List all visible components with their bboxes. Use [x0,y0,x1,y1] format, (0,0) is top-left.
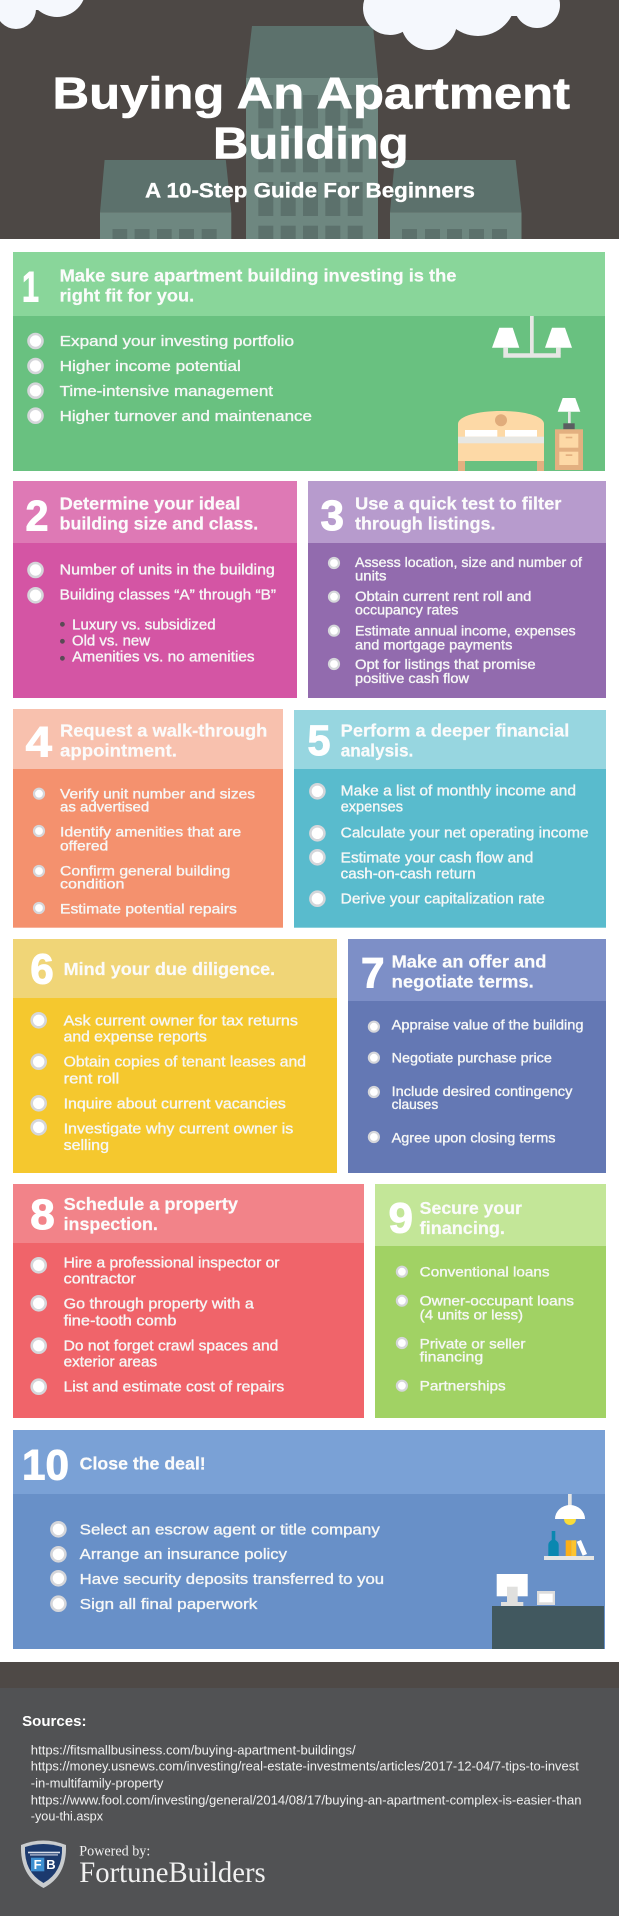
bullet list: exterior areas [64,1354,157,1370]
bullet list: as advertised [60,799,149,814]
icon: shelf with bottle and books [544,1531,594,1560]
icon: left cloud [0,0,86,29]
source links: https://www.fool.com/investing/general/2014/08/17/buying-an-apartment-complex-is-easier-than [31,1792,582,1807]
panel: step 9 [375,1184,606,1418]
panel: step 8 [13,1184,364,1418]
bullet list [51,1522,384,1613]
bullet list: Estimate potential repairs [60,901,237,916]
logo: FortuneBuilders shield [21,1840,66,1888]
bullet list: Partnerships [420,1378,506,1393]
bullet list: clauses [392,1097,438,1112]
sub-list: Amenities vs. no amenities [72,649,255,665]
sub-list: Luxury vs. subsidized [72,617,216,633]
bullet list: Assess location, size and number of [355,555,582,570]
panel: step 5 [294,710,606,928]
bullet list: units [355,568,387,583]
heading [60,493,258,533]
bullet list: Sign all final paperwork [80,1597,258,1613]
heading: negotiate terms. [392,971,534,991]
heading: analysis. [341,740,413,760]
bullet list [369,1017,584,1145]
heading [341,720,569,760]
logo: FortuneBuilders shield: B [46,1857,56,1872]
heading [60,266,457,306]
bullet list: Time-intensive management [60,384,273,400]
heading: Secure your [420,1198,522,1218]
bullet list [28,334,312,425]
bullet list [34,786,255,916]
bullet list: Obtain current rent roll and [355,589,531,604]
sub-list: Old vs. new [72,633,150,649]
bullet list [310,783,589,907]
bullet list: Do not forget crawl spaces and [64,1338,278,1354]
icon: right cloud [363,0,560,50]
bullet list: and mortgage payments [355,637,512,652]
bullet list: Opt for listings that promise [355,657,536,672]
heading [392,951,546,991]
step number 9: 9 [388,1195,413,1243]
heading: financing. [420,1218,505,1238]
bullet list: positive cash flow [355,671,469,686]
sub-list [60,617,255,665]
subtitle: A 10-Step Guide For Beginners [145,179,475,202]
icon: nightstand with lamp [555,398,583,470]
bullet list: Go through property with a [64,1296,255,1312]
bullet list: Investigate why current owner is [64,1121,293,1137]
bullet list: selling [64,1138,109,1154]
bullet list: Higher income potential [60,359,241,375]
bullet list: offered [60,838,108,853]
step number 6: 6 [30,946,54,994]
title: Building [213,119,409,168]
bullet list: Negotiate purchase price [392,1050,552,1065]
heading: Use a quick test to filter [355,493,562,513]
bullet list: condition [60,876,124,891]
illustration: apartment buildings [100,26,522,239]
bullet list [397,1264,574,1393]
bullet list: Select an escrow agent or title company [80,1522,380,1538]
heading: Request a walk-through [60,720,267,740]
bullet list: Confirm general building [60,863,230,878]
footer [0,1662,619,1916]
bullet list: Derive your capitalization rate [341,891,545,907]
bullet list: Owner-occupant loans [420,1293,574,1308]
heading: inspection. [64,1214,158,1234]
icon: pendant lamp [555,1494,585,1525]
powered by text: Powered by: [79,1844,150,1860]
source links [31,1742,582,1824]
bullet list: Private or seller [420,1336,526,1351]
bullet list: Agree upon closing terms [392,1130,556,1145]
heading [60,720,267,760]
heading: building size and class. [60,513,258,533]
bullet list: fine-tooth comb [64,1313,176,1329]
panel: step 1 [13,252,605,471]
bullet list: Hire a professional inspector or [64,1255,280,1271]
FortuneBuilders wordmark: FortuneBuilders [79,1856,266,1889]
panel: step 2 [13,481,297,698]
step number 10: 10 [22,1442,69,1490]
heading: through listings. [355,513,496,533]
bullet list: Estimate your cash flow and [341,850,533,866]
heading: appointment. [60,740,177,760]
logo: FortuneBuilders shield: F [34,1857,42,1872]
panel: step 4 [13,709,283,928]
source links: https://money.usnews.com/investing/real-estate-investments/articles/2017-12-04/7-tips-to-invest [31,1759,579,1774]
panel: step 6 [13,939,337,1173]
step number 7: 7 [361,949,384,997]
heading: Make an offer and [392,951,546,971]
icon: desk with computer [492,1574,604,1649]
bullet list: (4 units or less) [420,1307,523,1322]
bullet list: Have security deposits transferred to you [80,1572,384,1588]
bullet list: Verify unit number and sizes [60,786,255,801]
source links: https://fitsmallbusiness.com/buying-apartment-buildings/ [31,1742,356,1757]
step number 2: 2 [26,492,48,540]
bullet list [329,555,582,686]
bullet list: Obtain copies of tenant leases and [64,1054,306,1070]
heading [355,493,562,533]
bullet list: Higher turnover and maintenance [60,409,312,425]
bullet list: Calculate your net operating income [341,825,589,841]
heading [420,1198,522,1238]
panel: step 10 [13,1430,605,1649]
bullet list: financing [420,1349,483,1364]
source links: -you-thi.aspx [31,1809,103,1824]
bullet list: Inquire about current vacancies [64,1096,286,1112]
bullet list: and expense reports [64,1029,207,1045]
step number 4: 4 [26,719,52,767]
bullet list: Appraise value of the building [392,1017,584,1032]
step number 8: 8 [30,1191,55,1239]
icon: chandelier [492,316,572,358]
bullet list [28,563,276,603]
bullet list: expenses [341,800,403,816]
panel: step 7 [348,939,606,1173]
bullet list: Number of units in the building [60,563,275,579]
bullet list: Make a list of monthly income and [341,783,576,799]
icon: bed [458,411,544,471]
heading: Schedule a property [64,1194,238,1214]
bullet list: Include desired contingency [392,1084,572,1099]
heading: Perform a deeper financial [341,720,569,740]
title: Buying An Apartment [52,69,570,118]
sources heading: Sources: [22,1713,87,1730]
heading: right fit for you. [60,286,194,306]
heading: Make sure apartment building investing is the [60,266,457,286]
step number 3: 3 [320,492,344,540]
bullet list: rent roll [64,1071,119,1087]
bullet list: Ask current owner for tax returns [64,1013,298,1029]
bullet list: cash-on-cash return [341,866,476,882]
hero header [0,0,619,239]
title [52,69,570,168]
bullet list [32,1013,306,1154]
heading: Close the deal! [80,1453,206,1473]
heading: Determine your ideal [60,493,240,513]
bullet list: Conventional loans [420,1264,550,1279]
bullet list: Estimate annual income, expenses [355,623,576,638]
bullet list: Expand your investing portfolio [60,334,294,350]
bullet list: Identify amenities that are [60,824,242,839]
bullet list: occupancy rates [355,602,458,617]
bullet list: Arrange an insurance policy [80,1547,288,1563]
bullet list [32,1255,284,1395]
bullet list: Building classes “A” through “B” [60,587,276,603]
panel: step 3 [308,481,606,698]
step number 5: 5 [308,717,330,765]
heading [64,1194,238,1234]
bullet list: contractor [64,1271,136,1287]
heading: Mind your due diligence. [64,959,275,979]
source links: -in-multifamily-property [31,1775,164,1790]
step number 1: 1 [22,264,39,312]
bullet list: List and estimate cost of repairs [64,1379,284,1395]
